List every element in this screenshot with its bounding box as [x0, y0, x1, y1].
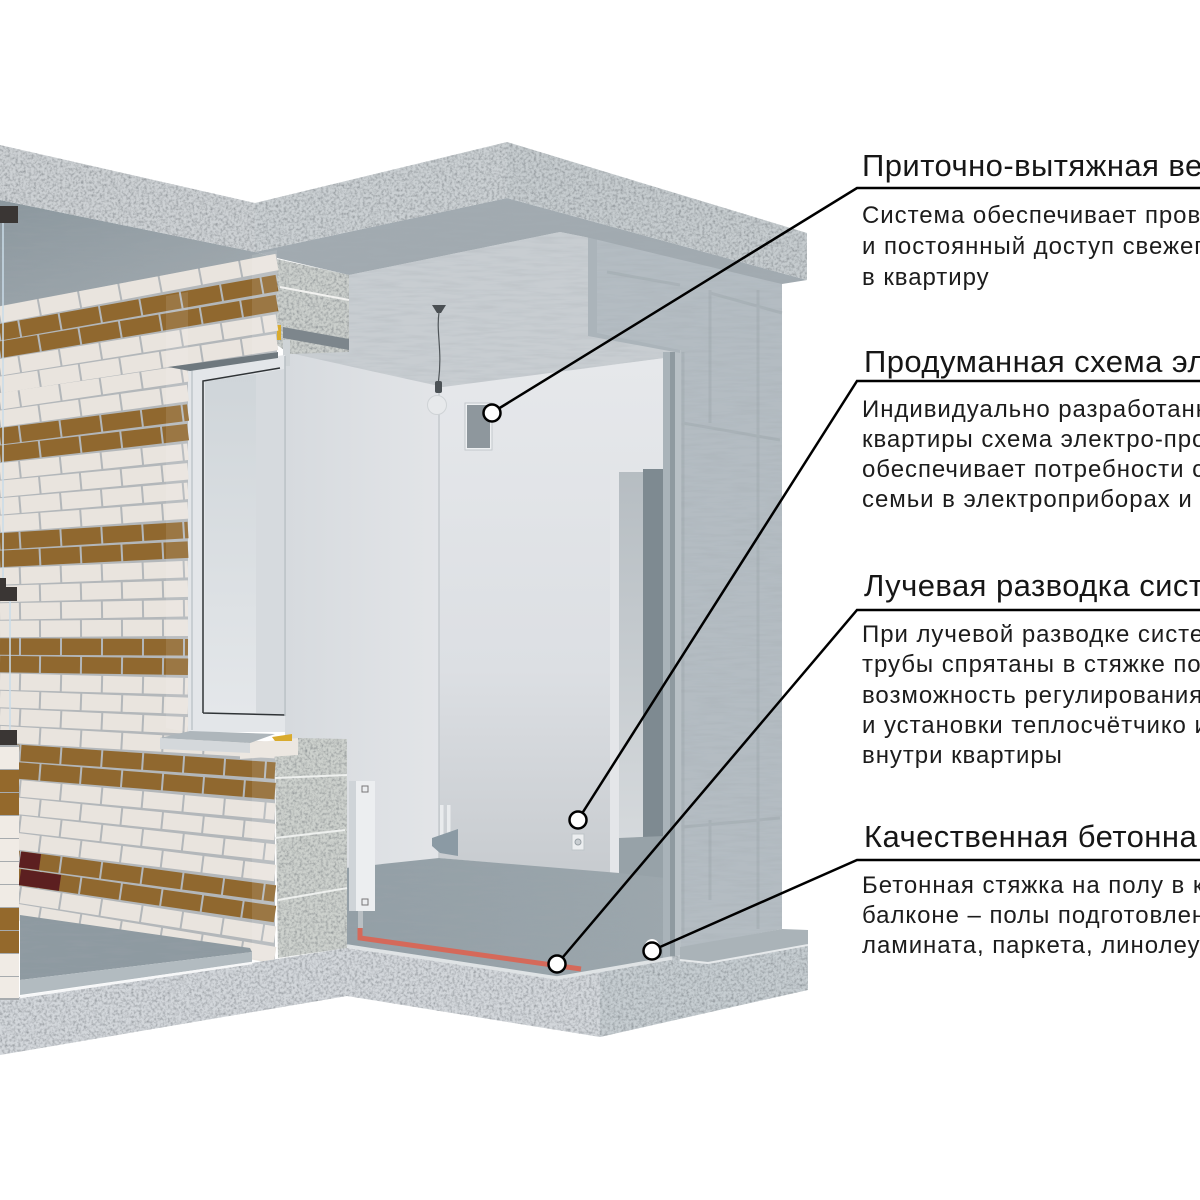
- rounded brick corner highlight: [166, 250, 277, 962]
- brick courses: [0, 262, 277, 955]
- insulation foam: [275, 325, 281, 340]
- screed edge: [20, 952, 252, 995]
- brick pier: [0, 745, 19, 1000]
- formwork marks: [607, 272, 782, 940]
- text: ventilation: в квартиру: [862, 264, 990, 291]
- ceiling: [290, 232, 680, 387]
- text: concrete screed: балконе – полы подготовлен: [862, 902, 1200, 929]
- dark brick patch: [20, 859, 60, 883]
- metal sill front: [160, 738, 250, 753]
- left room wall: [285, 350, 443, 870]
- radiator: [349, 781, 375, 928]
- text: radial piping: внутри квартиры: [862, 742, 1063, 769]
- right concrete wall: [588, 236, 782, 962]
- railing lines: [3, 222, 10, 730]
- ventilation grille: [465, 403, 492, 450]
- wall reveal: [663, 350, 681, 962]
- text: radial piping: [862, 621, 1200, 769]
- text: radial piping: и установки теплосчётчико и: [862, 712, 1200, 739]
- slab underside: [255, 198, 807, 284]
- text: ventilation: и постоянный доступ свежег: [862, 233, 1200, 260]
- text: wiring: семьи в электроприборах и: [862, 486, 1193, 513]
- text: wiring: квартиры схема электро-про: [862, 426, 1200, 453]
- cinder block wall: [275, 738, 347, 958]
- doorway: [610, 469, 666, 880]
- text: concrete screed: [862, 872, 1200, 959]
- balcony ceiling: [0, 200, 277, 308]
- text: radial piping: При лучевой разводке систе: [862, 621, 1200, 648]
- railing brackets: [0, 206, 18, 745]
- wall corner: [438, 387, 440, 858]
- power socket: [572, 834, 584, 850]
- back room wall: [439, 358, 665, 878]
- brick facade: [0, 250, 278, 962]
- text: concrete screed: Бетонная стяжка на полу в к: [862, 872, 1200, 899]
- floor: [345, 858, 672, 978]
- heading: concrete screed: Качественная бетонна: [864, 819, 1197, 854]
- step edge: [680, 945, 808, 963]
- metal sill top: [160, 731, 275, 743]
- callout 3 leader: [548, 610, 1200, 972]
- beam edge: [588, 236, 680, 353]
- heading: radial piping: Лучевая разводка сист: [864, 568, 1200, 603]
- sill foam: [272, 734, 292, 741]
- text: ventilation: [862, 202, 1200, 291]
- callout 4 leader: [644, 860, 1200, 960]
- callout 1 leader: [484, 188, 1200, 422]
- balcony floor: [20, 915, 252, 997]
- heading: wiring: Продуманная схема эл: [864, 344, 1200, 379]
- text: radial piping: трубы спрятаны в стяжке по: [862, 651, 1200, 678]
- ceiling lamp: [428, 305, 446, 414]
- drain pipes: [432, 805, 458, 856]
- window: [188, 355, 285, 732]
- steel angle: [283, 327, 349, 350]
- mortar base: [0, 254, 277, 962]
- block joints: [275, 775, 347, 900]
- upper step: [680, 929, 808, 963]
- white edge line: [20, 963, 252, 997]
- slab left face: [0, 948, 600, 1055]
- window seals: [203, 368, 285, 715]
- text: wiring: [862, 396, 1200, 513]
- window frame: [188, 355, 285, 732]
- floor edge strip: [347, 946, 672, 978]
- bottom concrete slab: [0, 929, 808, 1055]
- glass railing: [0, 206, 18, 745]
- lintel soffit: [168, 352, 278, 371]
- callout 2 leader: [570, 381, 1200, 828]
- text: radial piping: возможность регулирования: [862, 682, 1200, 709]
- slab middle face: [255, 142, 507, 252]
- concrete lintel: [275, 259, 349, 366]
- slab right face: [600, 945, 808, 1037]
- frame pipe: [283, 340, 290, 366]
- room interior: [285, 232, 680, 978]
- window right pane: [256, 369, 284, 715]
- window glass: [205, 374, 256, 713]
- white sill base: [240, 738, 298, 759]
- top concrete slab: [0, 142, 807, 308]
- window sill: [160, 731, 298, 759]
- heading: ventilation: Приточно-вытяжная ве: [862, 148, 1200, 183]
- red heating pipe: [360, 928, 581, 969]
- slab left face: [0, 145, 255, 252]
- lintel mortar: [280, 287, 349, 300]
- slab right face: [507, 142, 807, 280]
- text: wiring: обеспечивает потребности с: [862, 456, 1200, 483]
- text: wiring: Индивидуально разработанн: [862, 396, 1200, 423]
